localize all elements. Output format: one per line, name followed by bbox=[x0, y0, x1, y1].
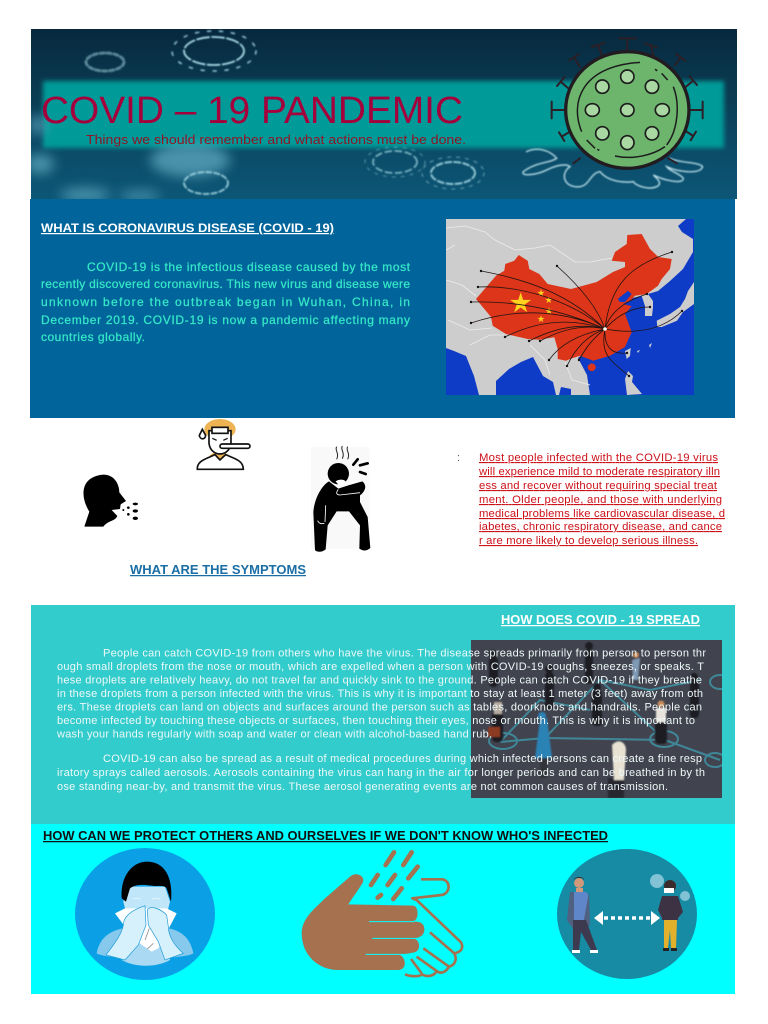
map: spread from Wuhan bbox=[446, 219, 695, 395]
text block: definition bbox=[41, 260, 411, 344]
text block: how it spreads: ers. These droplets can land on objects and surfaces around the person such as tables, doorknobs and handrails. People can bbox=[57, 702, 702, 714]
text block: severity note: medical problems like cardiovascular disease, d bbox=[479, 508, 725, 520]
text block: severity note: iabetes, chronic respiratory disease, and cance bbox=[479, 521, 722, 533]
text block: severity note: will experience mild to moderate respiratory illn bbox=[478, 466, 720, 478]
heading: what is coronavirus: WHAT IS CORONAVIRUS DISEASE (COVID - 19) bbox=[41, 221, 334, 235]
person left bbox=[567, 877, 598, 953]
text block: how it spreads: iratory sprays called aerosols. Aerosols containing the virus can hang in the air for longer periods and can be breathed in by th bbox=[57, 767, 705, 779]
text block: how it spreads: People can catch COVID-19 from others who have the virus. The disease spreads primarily from person to person thr bbox=[103, 648, 706, 660]
subtitle: Things we should remember and what actions must be done. bbox=[86, 132, 466, 147]
heading: how does covid spread: HOW DOES COVID - 19 SPREAD bbox=[501, 613, 700, 627]
text block: definition: unknown before the outbreak began in Wuhan, China, in bbox=[41, 295, 410, 309]
text block: definition: countries globally. bbox=[41, 330, 145, 344]
text block: severity note: r are more likely to develop serious illness. bbox=[479, 535, 698, 547]
icon: fever person bbox=[197, 419, 250, 469]
icon: coughing figure bbox=[311, 446, 370, 552]
text block: definition: December 2019. COVID-19 is now a pandemic affecting many bbox=[41, 313, 410, 327]
icon: washing hands bbox=[302, 852, 462, 976]
text block: how it spreads: ose standing near-by, and transmit the virus. These aerosol generating events are not common causes of transmission. bbox=[57, 781, 668, 793]
photo: people network bbox=[471, 640, 730, 798]
text block: definition: COVID-19 is the infectious disease caused by the most bbox=[87, 260, 411, 274]
text block: how it spreads: hese droplets are relatively heavy, do not travel far and quickly sink to the ground. People can catch COVID-19 if they breathe bbox=[57, 674, 702, 686]
colon mark: : bbox=[457, 452, 460, 464]
panel: how can we protect bbox=[31, 824, 735, 994]
title: COVID – 19 PANDEMIC bbox=[41, 90, 463, 132]
text block: how it spreads: wash your hands regularly with soap and water or clean with alcohol-based hand rub. bbox=[56, 728, 492, 740]
text block: how it spreads bbox=[56, 648, 706, 793]
text block: how it spreads: in these droplets from a person infected with the virus. This is why it is important to stay at least 1 meter (3 feet) away from oth bbox=[57, 688, 703, 700]
text block: definition: recently discovered coronavirus. This new virus and disease were bbox=[41, 277, 410, 291]
arrow: keep distance bbox=[594, 911, 660, 925]
text block: how it spreads: ough small droplets from the nose or mouth, which are expelled when a person with COVID-19 coughs, sneezes, or speaks. T bbox=[57, 661, 704, 673]
text block: how it spreads: become infected by touching these objects or surfaces, then touching their eyes, nose or mouth. This is why it is important to bbox=[57, 715, 695, 727]
person right bbox=[650, 874, 690, 951]
icon: covering a sneeze with tissue bbox=[75, 848, 215, 980]
text block: severity note: ess and recover without requiring special treat bbox=[479, 480, 718, 492]
panel: how does covid spread bbox=[31, 605, 735, 824]
heading: what are the symptoms: WHAT ARE THE SYMPTOMS bbox=[130, 563, 306, 577]
icon: green virus bbox=[552, 38, 703, 168]
text block: severity note bbox=[478, 452, 725, 547]
icon: physical distancing bbox=[557, 849, 697, 979]
text block: how it spreads: COVID-19 can also be spread as a result of medical procedures during which infected persons can create a fine resp bbox=[103, 753, 702, 765]
text block: severity note: ment. Older people, and those with underlying bbox=[479, 494, 722, 506]
text block: severity note: Most people infected with the COVID-19 virus bbox=[479, 452, 718, 464]
panel: title banner bbox=[26, 29, 737, 202]
heading: how can we protect: HOW CAN WE PROTECT OTHERS AND OURSELVES IF WE DON'T KNOW WHO'S INFECTED bbox=[43, 829, 608, 843]
icon: sneezing head bbox=[83, 475, 138, 527]
panel: what is coronavirus disease bbox=[30, 199, 735, 418]
